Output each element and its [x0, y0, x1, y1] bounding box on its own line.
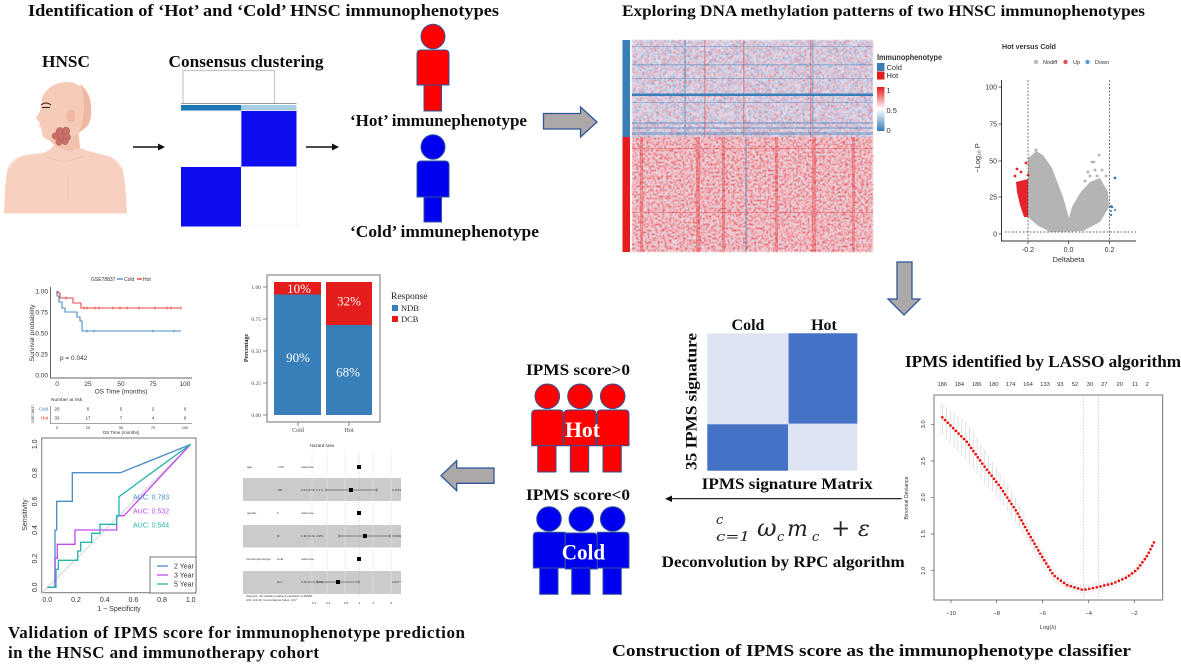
chart: Kaplan-Meier survival: 0.00	[35, 372, 48, 380]
chart: ROC curves	[22, 438, 196, 613]
chart: Kaplan-Meier survival: 75	[149, 381, 157, 388]
chart: volcano plot hot versus cold: 25	[989, 194, 997, 202]
chart: ROC curves: 0.2	[71, 597, 81, 604]
heading: HNSC: HNSC	[42, 52, 90, 71]
chart: ROC curves: 0.8	[157, 597, 167, 604]
chart: Kaplan-Meier survival: 50	[117, 381, 125, 388]
label: Hot: Hot	[565, 417, 601, 442]
heading: validation: Validation of IPMS score for immunophenotype prediction	[8, 623, 466, 642]
chart: methylation heatmap	[622, 40, 873, 252]
table: number at risk: 0	[184, 416, 187, 420]
chart: consensus matrix	[181, 70, 296, 226]
chart: ROC curves: 5 Year	[174, 582, 195, 588]
chart: LASSO deviance curve: 20	[1116, 382, 1123, 388]
chart: forest plot hazard ratio: age	[247, 465, 252, 469]
table: number at risk: 100	[182, 426, 188, 430]
chart: Kaplan-Meier survival: 0.25	[35, 352, 48, 358]
heading: methylation: Exploring DNA methylation patterns of two HNSC immunophenotypes	[622, 3, 1145, 20]
chart: ROC curves: 0.0	[32, 582, 39, 592]
chart: ROC curves: AUC: 0.544	[133, 522, 169, 530]
chart: Kaplan-Meier survival: 0	[55, 381, 59, 388]
heading: identification: Identification of ‘Hot’ and ‘Cold’ HNSC immunophenotypes	[28, 1, 499, 20]
chart: immunotherapy response stacked bars: NDB	[401, 303, 419, 313]
chart: forest plot hazard ratio: F	[277, 511, 279, 515]
chart: immunotherapy response stacked bars: DCB	[401, 314, 419, 324]
chart: forest plot hazard ratio: # Events: 30; Global p-value (Log-Rank): 0.20652	[246, 594, 312, 598]
chart: immunotherapy response stacked bars: 90%	[286, 350, 310, 365]
chart: immunotherapy response stacked bars: 68%	[336, 364, 360, 380]
chart: ROC curves: Sensitivity	[22, 499, 29, 531]
chart: LASSO deviance curve: 180	[989, 382, 999, 388]
chart: LASSO deviance curve: −8	[993, 611, 1000, 617]
chart: LASSO deviance curve: 1.0	[921, 567, 927, 575]
heading: consensus clustering: Consensus clustering	[168, 52, 324, 71]
chart: immunotherapy response stacked bars: 0.25	[251, 381, 261, 387]
chart: LASSO deviance curve: 2.5	[921, 457, 927, 465]
formula: deconvolution equation: ω	[757, 514, 777, 542]
icon: cold person	[417, 135, 449, 222]
chart: forest plot hazard ratio	[243, 443, 402, 605]
chart: volcano plot hot versus cold: -0.2	[1022, 247, 1034, 254]
table: number at risk: 20	[54, 406, 60, 412]
table: number at risk: 25	[86, 426, 90, 430]
chart: volcano plot hot versus cold	[973, 44, 1136, 264]
table: number at risk: 17	[85, 416, 91, 420]
arrow: gray block down	[888, 262, 920, 315]
label: hot column: Hot	[811, 317, 838, 334]
formula: deconvolution equation: +	[831, 516, 850, 542]
chart: Kaplan-Meier survival: 1.00	[35, 288, 48, 296]
chart: LASSO deviance curve: Binomial Deviance	[904, 476, 910, 519]
panel: validation	[8, 275, 466, 662]
formula: deconvolution equation	[716, 513, 870, 545]
chart: forest plot hazard ratio: reference	[301, 465, 314, 469]
chart: LASSO deviance curve: 93	[1057, 382, 1064, 388]
table: number at risk	[31, 397, 192, 435]
chart: immunotherapy response stacked bars: 1.00	[251, 285, 261, 291]
heading: validation second line: in the HNSC and immunotherapy cohort	[8, 643, 319, 662]
legend: heatmap annotation and colour scale: 0.5	[886, 106, 897, 115]
label: cold immunephenotype: ‘Cold’ immunephenotype	[350, 222, 539, 241]
chart: LASSO deviance curve: −10	[946, 611, 956, 617]
chart: ROC curves: 0.8	[32, 468, 39, 478]
panel: IPMS signature matrix and deconvolution	[662, 317, 905, 571]
chart: LASSO deviance curve: 164	[1023, 382, 1034, 388]
chart: forest plot hazard ratio: AIC: 113.40; Concordance Index: 0.67	[246, 598, 297, 602]
table: number at risk: 0	[56, 426, 58, 430]
chart: immunotherapy response stacked bars: Hot	[344, 428, 354, 434]
chart: ROC curves: AUC: 0.783	[133, 494, 169, 502]
formula: deconvolution equation: m	[787, 517, 808, 542]
chart: LASSO deviance curve: 52	[1072, 382, 1078, 388]
table: number at risk: Number at risk	[51, 397, 83, 403]
chart: LASSO deviance curve	[904, 382, 1163, 631]
icon: cold patient group	[533, 507, 629, 594]
chart: ROC curves: 0.4	[100, 597, 110, 604]
heading: LASSO: IPMS identified by LASSO algorithm	[905, 352, 1181, 371]
chart: LASSO deviance curve: 2.0	[921, 493, 927, 501]
chart: immunotherapy response stacked bars: Percentage	[244, 334, 250, 362]
chart: volcano plot hot versus cold: 0	[993, 232, 997, 238]
chart: ROC curves: 0.6	[32, 497, 39, 506]
chart: Kaplan-Meier survival: GSE78837	[91, 277, 116, 283]
label: cold column: Cold	[732, 317, 765, 334]
table: number at risk: 4	[152, 416, 155, 420]
table: number at risk: 7	[120, 416, 123, 420]
chart: ROC curves: 1.0	[32, 439, 39, 449]
chart: volcano plot hot versus cold: −Log₁₀ P	[973, 143, 982, 173]
table: number at risk: Hot	[41, 416, 49, 420]
legend: heatmap annotation and colour scale: Cold	[886, 63, 902, 72]
chart: Kaplan-Meier survival: 0.50	[35, 330, 48, 338]
chart: forest plot hazard ratio: Cold	[277, 557, 284, 561]
chart: volcano plot hot versus cold: Up	[1073, 60, 1080, 66]
table: number at risk: 5	[120, 406, 123, 412]
chart: Kaplan-Meier survival: p = 0.042	[60, 355, 88, 362]
heading: construction of IPMS score: Construction of IPMS score as the immunophenotype classifier	[612, 641, 1131, 660]
chart: Kaplan-Meier survival: 0.75	[35, 310, 48, 316]
table: number at risk: 33	[54, 416, 60, 420]
chart: volcano plot hot versus cold: 75	[989, 122, 997, 128]
formula: deconvolution equation: c	[777, 530, 785, 545]
chart: LASSO deviance curve: 133	[1040, 382, 1050, 388]
legend: heatmap annotation and colour scale: Hot	[886, 71, 899, 80]
chart: LASSO deviance curve: 2	[1146, 382, 1149, 388]
chart: volcano plot hot versus cold: 0.2	[1105, 247, 1114, 254]
arrow: gray block right	[544, 107, 597, 137]
chart: forest plot hazard ratio: <=65	[277, 465, 284, 469]
chart: Kaplan-Meier survival: Cold	[124, 277, 135, 283]
table: number at risk: GSE78837	[31, 405, 35, 423]
chart: forest plot hazard ratio: 0.047 *	[392, 580, 402, 584]
chart: immunotherapy response stacked bars: Cold	[292, 428, 304, 434]
chart: immunotherapy response stacked bars: Response	[391, 292, 427, 302]
panel: identification of immunophenotypes	[4, 1, 539, 241]
legend: heatmap annotation and colour scale: 0	[886, 126, 891, 135]
chart: signature matrix	[707, 333, 857, 471]
formula: deconvolution equation: c=1	[716, 530, 750, 545]
table: number at risk: 2	[152, 406, 155, 412]
chart: ROC curves: 0.0	[42, 597, 52, 604]
icon: hot patient group	[532, 384, 629, 472]
chart: ROC curves: AUC: 0.532	[133, 508, 169, 516]
chart: forest plot hazard ratio: 5	[390, 601, 392, 605]
label: matrix caption: IPMS signature Matrix	[702, 476, 873, 493]
chart: LASSO deviance curve: 186	[937, 382, 947, 388]
table: number at risk: 0	[184, 406, 187, 412]
chart: LASSO deviance curve: 3.0	[921, 420, 927, 428]
chart: forest plot hazard ratio: 0.4551	[392, 488, 402, 492]
chart: ROC curves: 0.2	[32, 554, 39, 564]
table: number at risk: OS Time (months)	[103, 430, 140, 435]
chart: forest plot hazard ratio: >65	[277, 488, 282, 492]
chart: immunotherapy response stacked bars: 0.50	[251, 349, 261, 355]
chart: ROC curves: 2 Year	[174, 564, 195, 570]
chart: LASSO deviance curve: Log(λ)	[1040, 625, 1056, 631]
chart: Kaplan-Meier survival: Survival probability	[29, 304, 36, 362]
chart: forest plot hazard ratio: 0.6994	[392, 534, 402, 538]
table: number at risk: 75	[151, 426, 155, 430]
chart: immunotherapy response stacked bars	[244, 275, 427, 434]
label: 35 IPMS signature: 35 IPMS signature	[684, 333, 701, 470]
chart: forest plot hazard ratio: 0.1	[312, 601, 317, 605]
chart: forest plot hazard ratio: 0.63 (0.18, 2.17)	[301, 488, 323, 492]
chart: LASSO deviance curve: −2	[1131, 611, 1138, 617]
chart: immunotherapy response stacked bars: 0.75	[251, 317, 261, 323]
chart: Kaplan-Meier survival: 100	[180, 381, 191, 388]
arrow: gray block left	[441, 461, 494, 491]
label: score above zero: IPMS score>0	[526, 362, 630, 379]
chart: forest plot hazard ratio: 0.2	[326, 601, 331, 605]
legend: heatmap annotation and colour scale: 1	[886, 86, 891, 95]
chart: LASSO deviance curve: −4	[1085, 611, 1093, 617]
chart: LASSO deviance curve: 174	[1006, 382, 1016, 388]
chart: LASSO deviance curve: 30	[1087, 382, 1093, 388]
formula: deconvolution equation: ε	[858, 517, 870, 542]
label: hot immunephenotype: ‘Hot’ immunephenotype	[350, 111, 527, 130]
chart: Kaplan-Meier survival: Hot	[143, 277, 151, 283]
panel: IPMS score groups	[526, 362, 630, 594]
chart: forest plot hazard ratio: 1.30 (0.34, 4.95)	[301, 534, 323, 538]
chart: ROC curves: 0.6	[129, 597, 138, 604]
arrow: HNSC to clustering	[133, 144, 165, 150]
table: number at risk: 50	[119, 426, 123, 430]
chart: forest plot hazard ratio: M	[277, 534, 280, 538]
chart: forest plot hazard ratio: reference	[301, 511, 314, 515]
chart: immunotherapy response stacked bars: 0.00	[251, 413, 261, 419]
chart: volcano plot hot versus cold: Hot versus Cold	[1002, 44, 1056, 51]
table: number at risk: 6	[87, 406, 90, 412]
legend: heatmap annotation and colour scale: Immunophenotype	[877, 53, 942, 62]
chart: LASSO deviance curve: 184	[954, 382, 965, 388]
chart: ROC curves: 1 − Specificity	[97, 606, 141, 613]
chart: volcano plot hot versus cold: 50	[989, 158, 997, 166]
chart: forest plot hazard ratio: Hot	[277, 580, 282, 584]
table: number at risk: Cold	[39, 406, 48, 412]
chart: forest plot hazard ratio: 2	[372, 601, 374, 605]
chart: Kaplan-Meier survival: OS Time (months)	[95, 388, 147, 396]
chart: forest plot hazard ratio: 0.28 (0.13, 1.00)	[301, 580, 323, 584]
chart: ROC curves: 1.0	[186, 597, 196, 604]
chart: forest plot hazard ratio: Hazard ratio	[310, 443, 335, 448]
chart: ROC curves: 0.4	[32, 525, 39, 535]
chart: volcano plot hot versus cold: 0.0	[1064, 247, 1073, 254]
arrow: matrix to score	[665, 496, 902, 502]
chart: forest plot hazard ratio: 1	[358, 601, 360, 605]
label: deconvolution: Deconvolution by RPC algorithm	[662, 554, 905, 571]
chart: LASSO deviance curve: −6	[1039, 611, 1046, 617]
chart: volcano plot hot versus cold: Down	[1095, 60, 1109, 66]
chart: volcano plot hot versus cold: Deltabeta	[1052, 255, 1085, 264]
icon: patient head and torso with neck tumour	[4, 82, 127, 214]
chart: forest plot hazard ratio: Immunophenotype	[246, 557, 271, 561]
chart: Kaplan-Meier survival	[29, 277, 192, 396]
chart: LASSO deviance curve: 1.5	[921, 530, 927, 538]
legend: heatmap annotation and colour scale	[877, 53, 942, 135]
formula: deconvolution equation: c	[716, 513, 724, 528]
chart: immunotherapy response stacked bars: 10%	[287, 281, 311, 296]
label: Cold: Cold	[562, 540, 605, 564]
arrow: clustering to phenotypes	[306, 144, 339, 150]
panel: DNA methylation patterns	[622, 3, 1145, 264]
chart: Kaplan-Meier survival: 25	[84, 381, 92, 388]
chart: LASSO deviance curve: 186	[972, 382, 982, 388]
chart: ROC curves: 3 Year	[174, 572, 195, 580]
chart: forest plot hazard ratio: 0.5	[344, 601, 349, 605]
panel: IPMS identified by LASSO	[904, 352, 1181, 631]
chart: LASSO deviance curve: 27	[1101, 382, 1108, 388]
label: score below zero: IPMS score<0	[526, 487, 630, 504]
chart: immunotherapy response stacked bars: 32%	[337, 294, 361, 308]
icon: hot person	[417, 24, 449, 111]
chart: forest plot hazard ratio: gender	[247, 511, 256, 515]
formula: deconvolution equation: c	[812, 530, 820, 545]
chart: LASSO deviance curve: 11	[1132, 382, 1138, 388]
chart: forest plot hazard ratio: reference	[301, 557, 314, 561]
chart: volcano plot hot versus cold: 100	[985, 84, 997, 92]
chart: volcano plot hot versus cold: Nodiff	[1043, 60, 1058, 66]
